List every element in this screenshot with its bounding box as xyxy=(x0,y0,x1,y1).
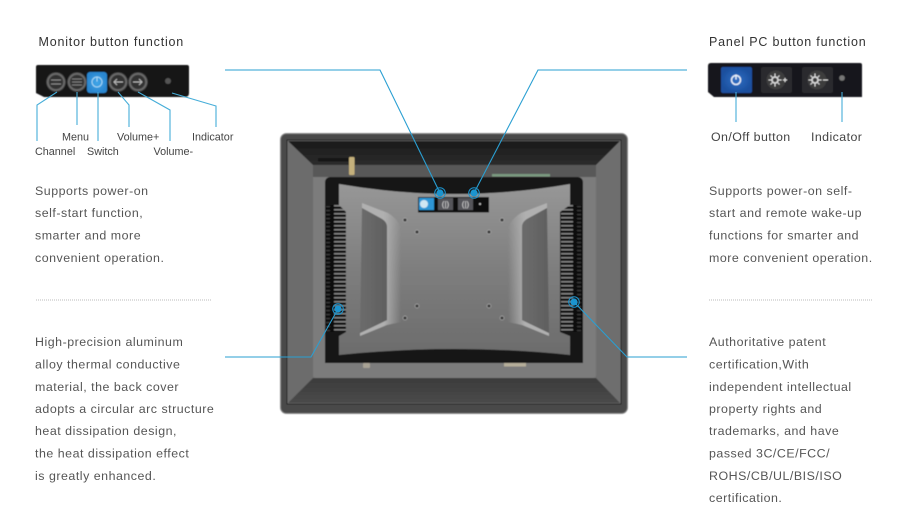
callout line: certification to right side xyxy=(574,302,687,357)
callout marker: top left xyxy=(435,188,445,198)
text block: patent certification xyxy=(709,335,852,505)
heading: monitor button function: Monitor button function xyxy=(38,35,184,49)
text block: patent certification: passed 3C/CE/FCC/ xyxy=(709,446,830,460)
right heat sink fins xyxy=(561,205,582,332)
text block: aluminum alloy: alloy thermal conductive xyxy=(35,358,180,372)
button: switch xyxy=(87,72,107,93)
text block: aluminum alloy: adopts a circular arc structure xyxy=(35,402,214,416)
monitor button labels: Volume- xyxy=(154,146,194,158)
text block: remote wake-up xyxy=(709,184,873,265)
monitor button leader lines xyxy=(37,92,216,141)
back cover xyxy=(339,184,570,355)
button: brightness up xyxy=(761,67,792,93)
panel PC button labels xyxy=(711,130,862,144)
panel: monitor button strip xyxy=(36,65,189,97)
text block: remote wake-up: functions for smarter and xyxy=(709,228,859,242)
text block: power-on function: convenient operation. xyxy=(35,251,164,265)
text block: power-on function: self-start function, xyxy=(35,206,143,220)
heading: panel PC button function: Panel PC button function xyxy=(709,35,866,49)
callout line: panel PC buttons to rear strip xyxy=(474,70,687,193)
monitor button labels: Indicator xyxy=(192,132,234,144)
text block: patent certification: independent intellectual xyxy=(709,380,852,394)
panel: monitor rear view xyxy=(280,134,628,414)
panel PC button labels: On/Off button xyxy=(711,130,791,144)
button: volume minus xyxy=(128,72,148,92)
panel PC leader lines xyxy=(736,92,842,122)
mounting screws xyxy=(403,218,504,320)
text block: power-on function: smarter and more xyxy=(35,228,141,242)
rear button strip: (|) xyxy=(462,200,470,209)
green circuit strip xyxy=(492,174,550,176)
callout line: aluminum cover to heat sink xyxy=(225,309,338,357)
callout marker: left heat sink xyxy=(333,304,343,314)
button: channel xyxy=(46,72,66,92)
text block: patent certification: certification,With xyxy=(709,358,809,372)
connectors on lower edge xyxy=(363,363,526,368)
text block: patent certification: ROHS/CB/UL/BIS/ISO xyxy=(709,469,842,483)
monitor button labels xyxy=(35,132,234,158)
button: menu xyxy=(67,72,87,92)
antenna xyxy=(318,157,354,175)
monitor inner frame xyxy=(287,140,621,404)
left heat sink fins xyxy=(325,205,346,332)
monitor button labels: Volume+ xyxy=(117,132,159,144)
left recess xyxy=(360,203,401,336)
text block: aluminum alloy xyxy=(35,335,214,483)
text block: aluminum alloy: heat dissipation design, xyxy=(35,424,177,438)
text block: power-on function: Supports power-on xyxy=(35,184,149,198)
button: brightness down xyxy=(802,67,833,93)
text block: power-on function xyxy=(35,184,164,265)
callout line: monitor buttons to rear strip xyxy=(225,70,440,193)
callout marker: top right xyxy=(469,188,479,198)
monitor button labels: Switch xyxy=(87,146,119,158)
button: volume plus xyxy=(108,72,128,92)
right recess xyxy=(508,203,549,336)
text block: patent certification: certification. xyxy=(709,491,782,505)
text block: aluminum alloy: High-precision aluminum xyxy=(35,335,183,349)
text block: aluminum alloy: the heat dissipation effect xyxy=(35,446,189,460)
button: on/off xyxy=(721,67,752,93)
text block: patent certification: property rights and xyxy=(709,402,822,416)
indicator light xyxy=(839,75,845,81)
callout marker: right heat sink xyxy=(569,297,579,307)
rear button strip xyxy=(418,197,489,212)
text block: patent certification: Authoritative patent xyxy=(709,335,826,349)
monitor button labels: Menu xyxy=(62,132,89,144)
text block: patent certification: trademarks, and have xyxy=(709,424,839,438)
monitor button labels: Channel xyxy=(35,146,75,158)
text block: aluminum alloy: material, the back cover xyxy=(35,380,179,394)
panel PC button labels: Indicator xyxy=(811,130,862,144)
indicator light xyxy=(165,78,171,84)
monitor outer bezel xyxy=(280,134,628,414)
text block: remote wake-up: Supports power-on self- xyxy=(709,184,853,198)
panel: panel PC button strip xyxy=(708,63,862,97)
text block: remote wake-up: more convenient operation. xyxy=(709,251,873,265)
text block: aluminum alloy: is greatly enhanced. xyxy=(35,469,156,483)
rear button strip: (|) xyxy=(442,200,450,209)
text block: remote wake-up: start and remote wake-up xyxy=(709,206,862,220)
rear cavity xyxy=(325,177,583,363)
